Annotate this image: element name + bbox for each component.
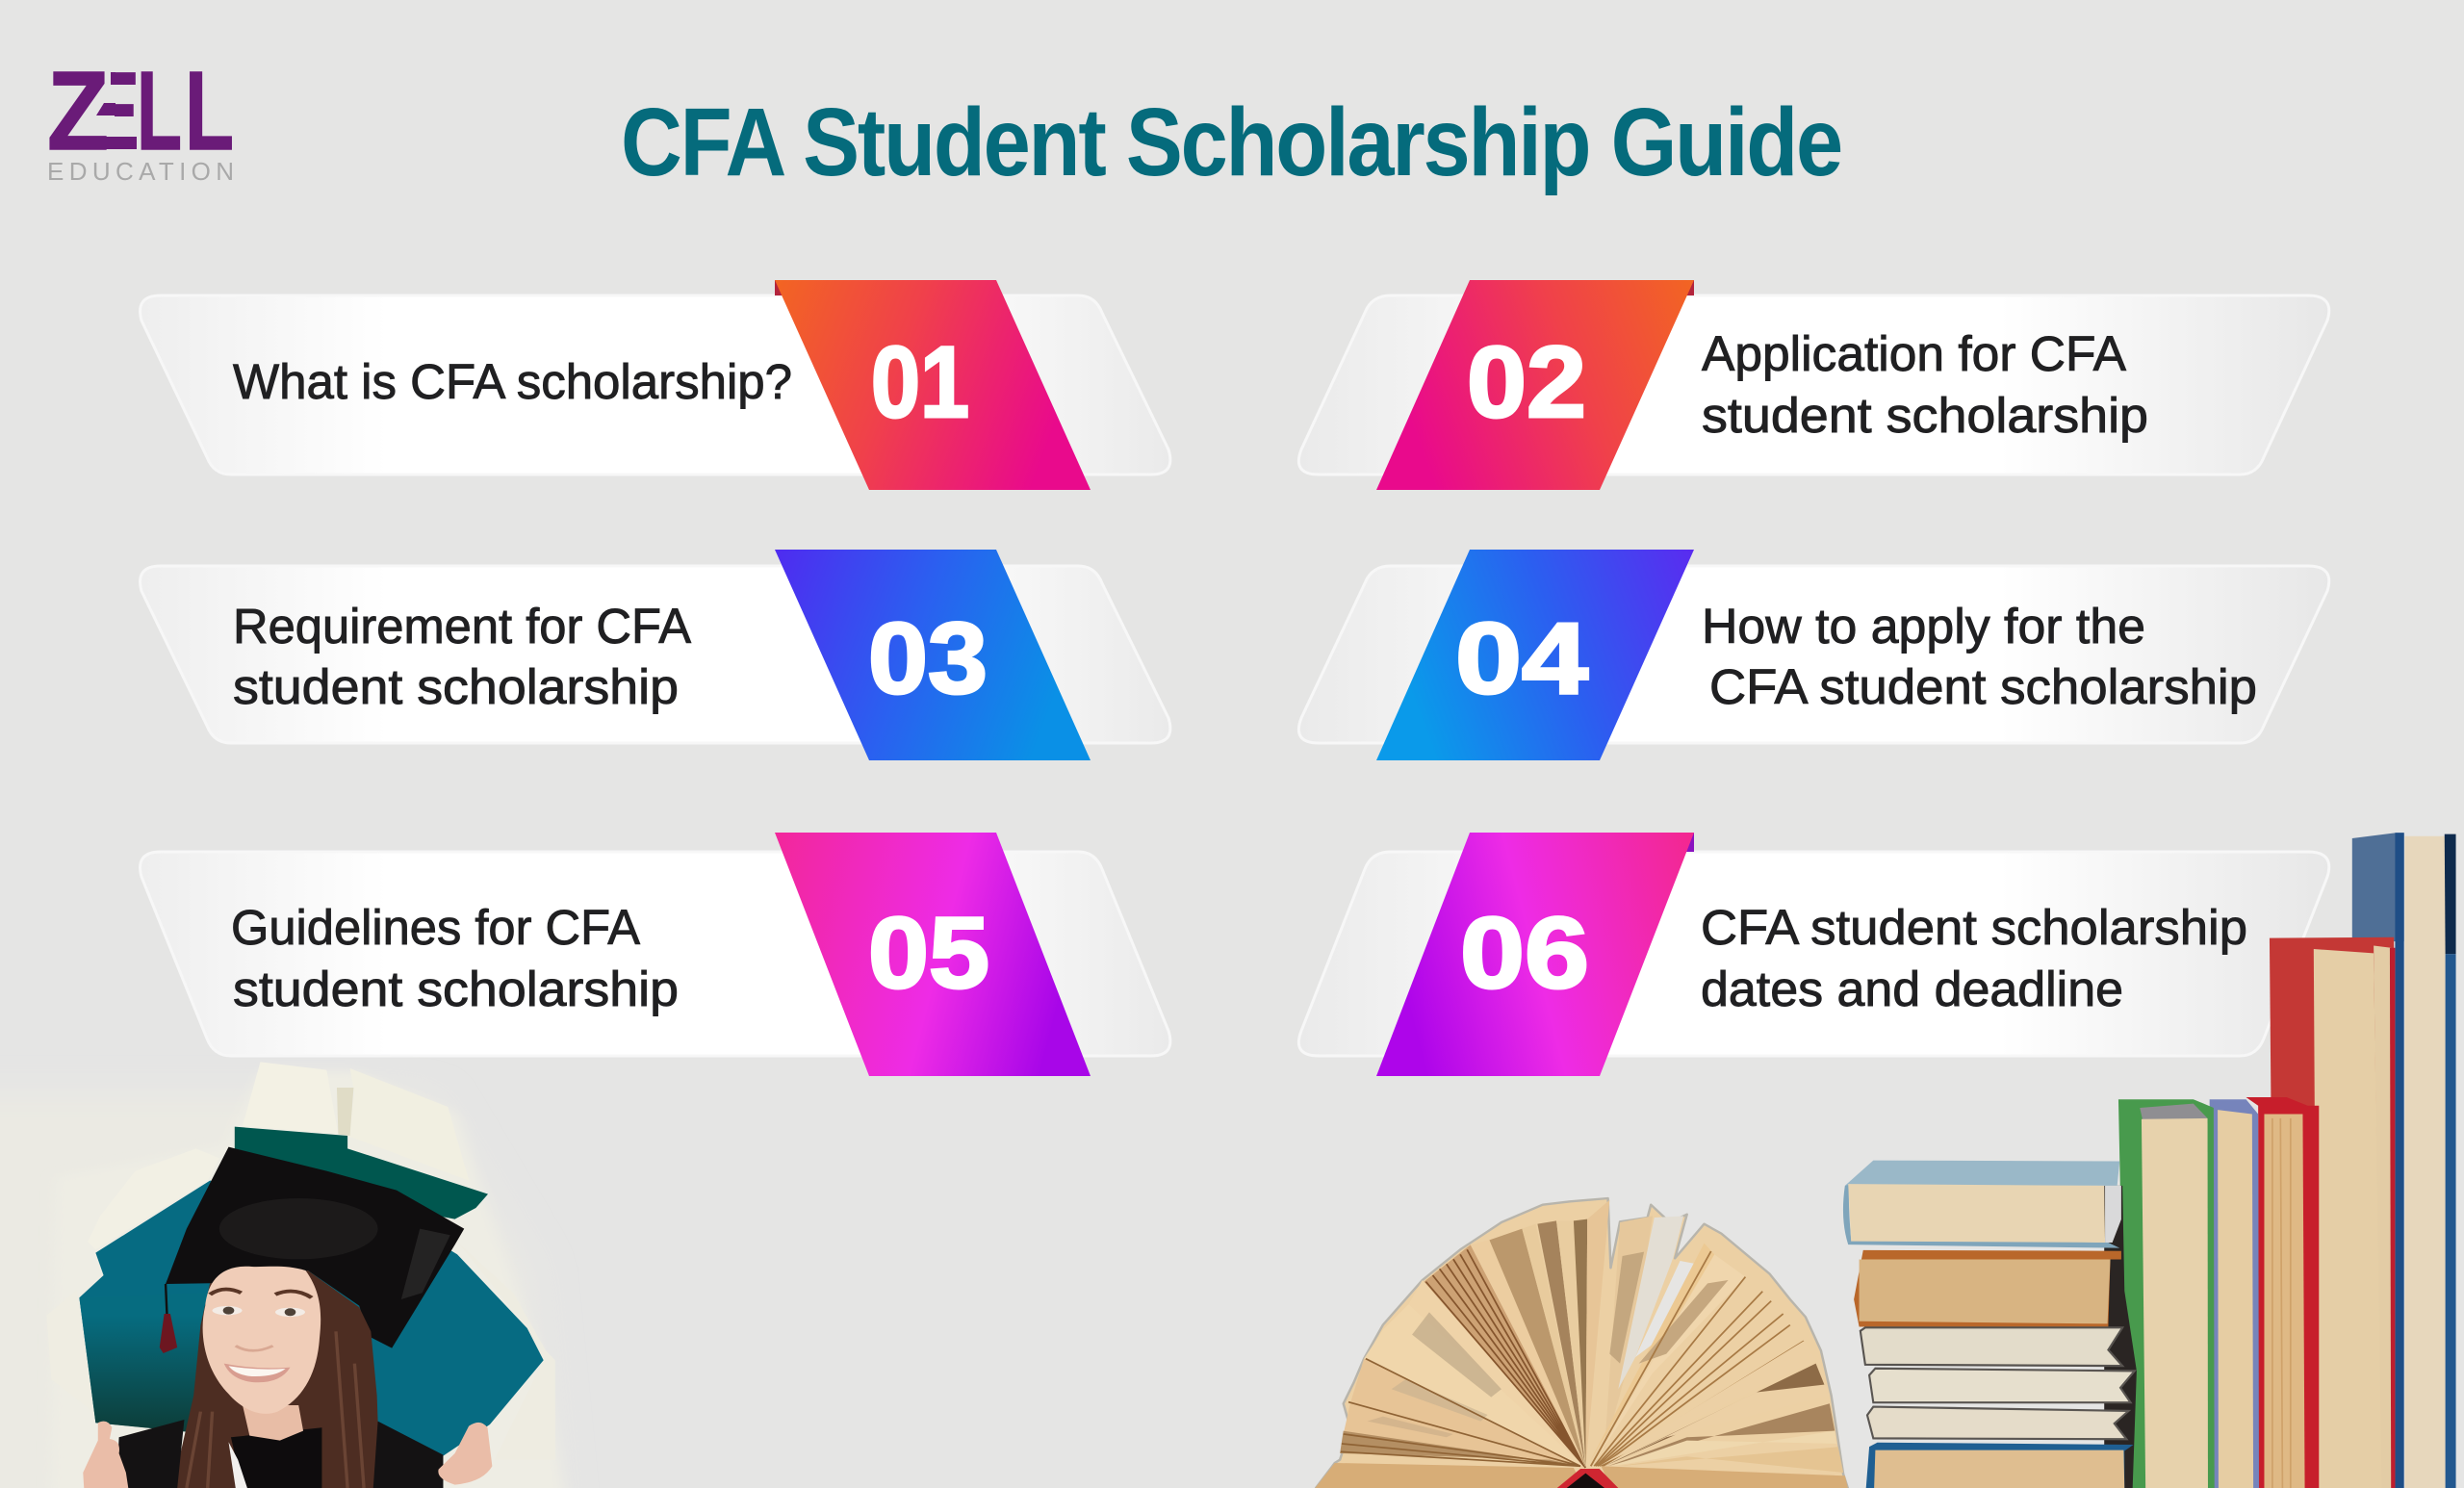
panel: 02 Application xyxy=(1298,280,2329,490)
student body xyxy=(116,1420,443,1488)
stacked pale book 2 xyxy=(1869,1369,2135,1402)
logo: Zell Education: E xyxy=(94,48,140,173)
panel: 02 Application: student scholarship xyxy=(1702,388,2148,443)
panel: 04 How to apply: 04 xyxy=(1455,603,1588,715)
logo: Zell Education xyxy=(49,71,232,181)
torn hole: dark lower left xyxy=(79,1293,210,1434)
panel: 04 How to apply xyxy=(1298,550,2329,760)
student hair xyxy=(172,1270,380,1488)
illustration: open fan book xyxy=(1315,1198,1848,1488)
panel: 03 Requirement xyxy=(141,550,1170,760)
stacked tan book xyxy=(1854,1250,2121,1326)
panel: 05 Guidelines xyxy=(141,833,1170,1076)
thin blue book xyxy=(2210,1099,2259,1488)
book spine xyxy=(1557,1469,1618,1488)
panel: 04 How to apply: How to apply for the xyxy=(1702,599,2145,654)
panel: 06 Dates and deadline: 06 xyxy=(1460,897,1589,1010)
panel: 05 Guidelines: student scholarship xyxy=(233,962,679,1016)
panel: 03 Requirement: Requirement for CFA xyxy=(233,599,691,654)
panel: 01 What is CFA scholarship: What is CFA scholarship? xyxy=(233,354,792,409)
illustration: graduate in torn paper xyxy=(0,1062,569,1488)
panel: 06 Dates and deadline xyxy=(1298,833,2329,1076)
graduation cap xyxy=(160,1147,464,1353)
panel: 06 Dates and deadline: CFA student scholarship xyxy=(1701,900,2247,955)
panel: 03 Requirement: 03 xyxy=(868,603,988,715)
illustration: book stacks xyxy=(1843,833,2456,1488)
student hands xyxy=(83,1422,492,1488)
panel: 04 How to apply: CFA student scholarship xyxy=(1709,659,2257,714)
logo: Zell Education: EDUCATION xyxy=(47,157,234,186)
stacked bottom blue book xyxy=(1866,1443,2134,1488)
stack shadows xyxy=(2104,1186,2137,1488)
panel: 02 Application: Application for CFA xyxy=(1702,326,2126,381)
logo: Zell Education: L xyxy=(185,48,234,173)
green book xyxy=(2118,1099,2215,1488)
title: CFA Student Scholarship Guide xyxy=(621,89,1841,196)
student face xyxy=(203,1267,321,1441)
panel: 02 Application: 02 xyxy=(1467,326,1586,439)
torn hole: teal xyxy=(79,1181,544,1456)
thin red book xyxy=(2246,1097,2319,1488)
panel: 01 What is CFA scholarship: 01 xyxy=(871,326,969,439)
torn hole: green strip xyxy=(235,1127,488,1219)
panel: 03 Requirement: student scholarship xyxy=(233,659,679,714)
fan pages xyxy=(1340,1200,1843,1473)
panel: 05 Guidelines: Guidelines for CFA xyxy=(231,900,640,955)
stacked blue book xyxy=(1843,1161,2121,1248)
tall red book xyxy=(2270,937,2395,1488)
logo: Zell Education: L xyxy=(137,48,182,173)
panel: 01 What is CFA scholarship xyxy=(141,280,1170,490)
tall blue book xyxy=(2352,833,2456,1488)
logo: Zell Education: Z xyxy=(47,48,109,173)
book base pages xyxy=(1315,1463,1584,1488)
panel: 05 Guidelines: 05 xyxy=(868,897,989,1010)
panel: 06 Dates and deadline: dates and deadline xyxy=(1701,962,2123,1016)
stacked pale book xyxy=(1861,1327,2122,1366)
stacked pale book 3 xyxy=(1867,1407,2128,1439)
